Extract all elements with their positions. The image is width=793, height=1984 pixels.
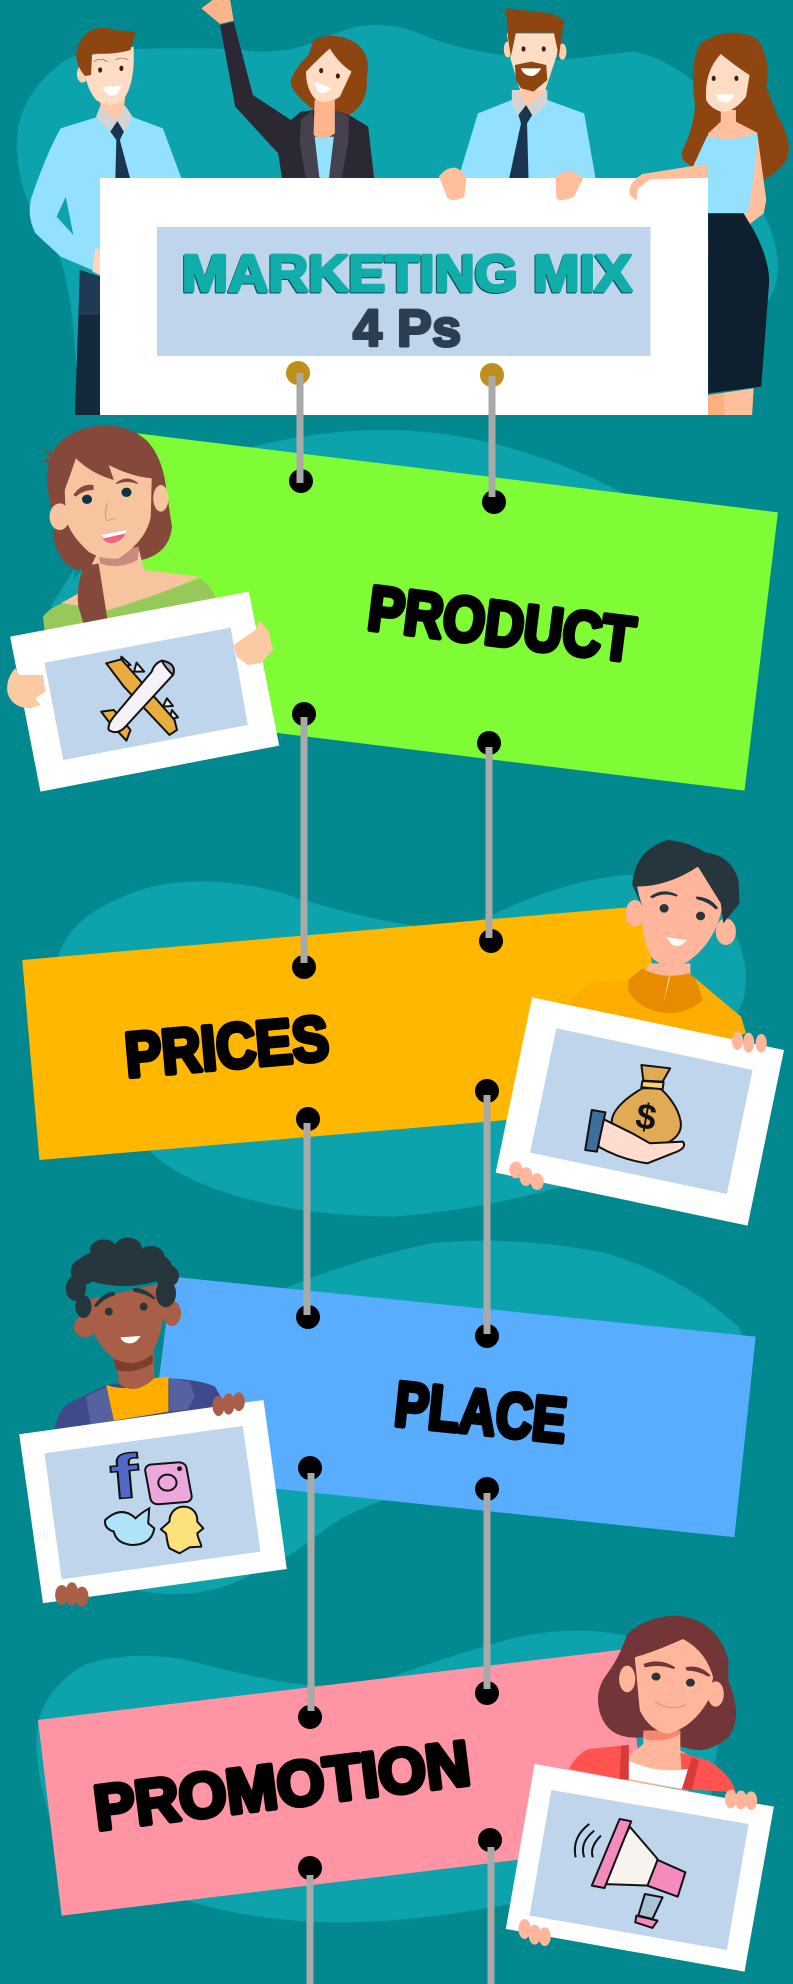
icon: snapchat [161,1507,203,1553]
person: man with prices card [531,840,746,1040]
icon: dollar sign: $ [633,1095,660,1138]
icon: megaphone [575,1819,685,1928]
person: woman with product card [39,425,216,630]
label: product: PRODUCT [364,573,639,676]
title text: MARKETING MIX [182,245,632,303]
icon: plane [101,657,178,741]
icon: facebook f: f [107,1442,142,1513]
hands over the sign [439,166,708,201]
label: place: PLACE [392,1369,570,1456]
panel: prices banner [22,906,663,1160]
person: man with place card [55,1238,223,1433]
panel: title sign [100,166,708,415]
icon: instagram [144,1462,193,1505]
panel: product banner [104,433,778,791]
card: product plane [7,592,279,792]
person: woman with promotion card [569,1616,736,1792]
card: prices money bag [496,997,784,1226]
title background [157,227,650,356]
label: prices: PRICES [122,1003,331,1091]
group of four business people [30,0,789,415]
card: promotion megaphone [506,1764,774,1972]
label: promotion: PROMOTION [90,1728,474,1844]
icon: money bag [585,1065,684,1163]
icon: twitter [105,1508,154,1545]
connector rods and holes [286,361,506,1984]
subtitle text: 4 Ps [353,300,461,358]
card: place social icons [19,1392,287,1607]
panel: promotion banner [38,1649,647,1916]
panel: place banner [147,1277,756,1537]
